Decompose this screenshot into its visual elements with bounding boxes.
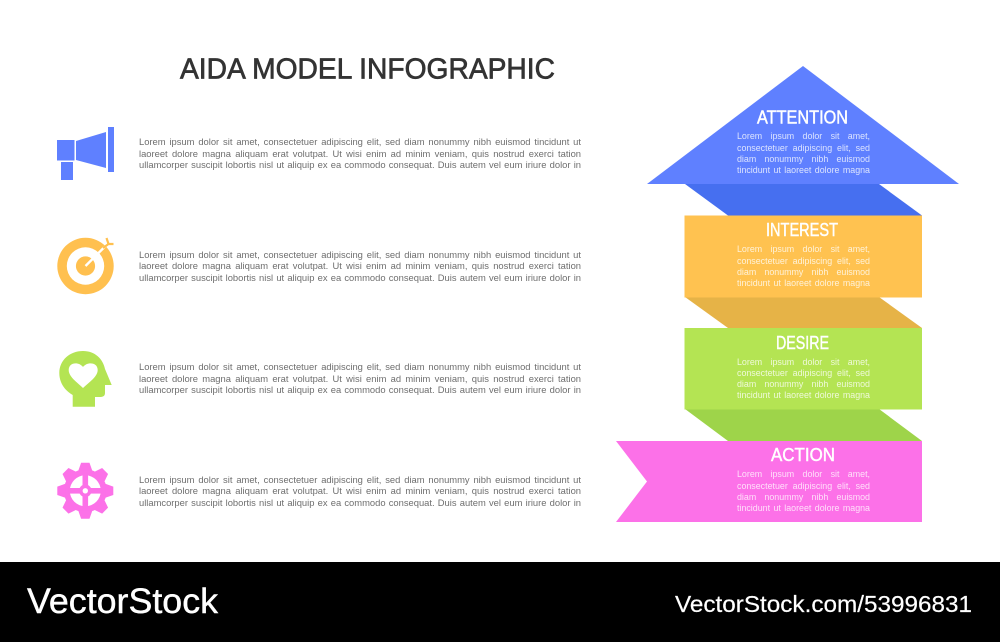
icon: gear	[57, 463, 113, 519]
panel: action: diam nonummy nibh euismod	[737, 492, 870, 502]
text block: interest description: ullamcorper suscipit lobortis nisl ut aliquip ex ea commodo consequat. Duis autem vel eum iriure dolor in	[139, 272, 581, 282]
text block: desire description: laoreet dolore magna aliquam erat volutpat. Ut wisi enim ad minim veniam, quis nostrud exerci tation	[139, 372, 581, 384]
panel: attention: Lorem ipsum dolor sit amet,	[737, 131, 870, 141]
panel: action	[616, 441, 922, 522]
footer bar	[0, 562, 1000, 642]
panel: interest: consectetuer adipiscing elit, sed	[737, 256, 870, 266]
icon: megaphone	[57, 127, 114, 180]
panel: action: tincidunt ut laoreet dolore magna	[737, 503, 870, 513]
fold: interest to desire	[685, 297, 922, 328]
text block: interest description: Lorem ipsum dolor sit amet, consectetuer adipiscing elit, sed diam nonummy nibh euismod tincidunt ut	[139, 248, 581, 260]
panel: attention: consectetuer adipiscing elit, sed	[737, 142, 870, 152]
panel: attention	[647, 66, 959, 184]
fold: attention to interest	[685, 184, 922, 216]
panel: attention: ATTENTION	[757, 108, 848, 128]
footer bar: VectorStock	[27, 582, 219, 621]
panel: desire: consectetuer adipiscing elit, sed	[737, 368, 870, 378]
text block: attention description: ullamcorper suscipit lobortis nisl ut aliquip ex ea commodo consequat. Duis autem vel eum iriure dolor in	[139, 159, 581, 170]
text block: interest description	[139, 248, 583, 284]
panel: action: Lorem ipsum dolor sit amet,	[737, 469, 870, 479]
text block: action description: laoreet dolore magna aliquam erat volutpat. Ut wisi enim ad minim veniam, quis nostrud exerci tation	[139, 485, 581, 496]
text block: action description: Lorem ipsum dolor sit amet, consectetuer adipiscing elit, sed diam nonummy nibh euismod tincidunt ut	[139, 474, 581, 484]
icon: head with heart	[59, 351, 112, 407]
panel: action: consectetuer adipiscing elit, sed	[737, 480, 870, 490]
text block: desire description: Lorem ipsum dolor sit amet, consectetuer adipiscing elit, sed diam nonummy nibh euismod tincidunt ut	[139, 361, 581, 372]
text block: attention description	[139, 136, 583, 172]
icon: target	[57, 238, 114, 294]
footer bar: VectorStock.com/53996831	[675, 591, 972, 617]
text block: desire description	[139, 361, 583, 397]
text block: attention description: Lorem ipsum dolor sit amet, consectetuer adipiscing elit, sed diam nonummy nibh euismod tincidunt ut	[139, 136, 581, 147]
text block: attention description: laoreet dolore magna aliquam erat volutpat. Ut wisi enim ad minim veniam, quis nostrud exerci tation	[139, 148, 581, 158]
panel: interest	[684, 216, 922, 298]
panel: interest: INTEREST	[766, 220, 838, 240]
panel: desire	[684, 328, 922, 410]
fold: desire to action	[685, 409, 922, 441]
panel: desire: diam nonummy nibh euismod	[737, 379, 870, 389]
panel: attention: tincidunt ut laoreet dolore magna	[737, 165, 870, 175]
panel: attention: diam nonummy nibh euismod	[737, 154, 870, 164]
panel: interest: diam nonummy nibh euismod	[737, 267, 870, 277]
panel: desire: Lorem ipsum dolor sit amet,	[737, 357, 870, 367]
panel: interest: Lorem ipsum dolor sit amet,	[737, 244, 870, 254]
panel: desire: tincidunt ut laoreet dolore magna	[737, 390, 870, 400]
panel: interest: tincidunt ut laoreet dolore magna	[737, 278, 870, 288]
panel: desire: DESIRE	[776, 333, 829, 353]
text block: desire description: ullamcorper suscipit lobortis nisl ut aliquip ex ea commodo consequat. Duis autem vel eum iriure dolor in	[139, 384, 581, 395]
text block: action description	[139, 474, 583, 510]
title: AIDA MODEL INFOGRAPHIC	[180, 54, 555, 86]
text block: interest description: laoreet dolore magna aliquam erat volutpat. Ut wisi enim ad minim veniam, quis nostrud exerci tation	[139, 260, 581, 271]
text block: action description: ullamcorper suscipit lobortis nisl ut aliquip ex ea commodo consequat. Duis autem vel eum iriure dolor in	[139, 496, 581, 508]
panel: action: ACTION	[771, 445, 835, 465]
